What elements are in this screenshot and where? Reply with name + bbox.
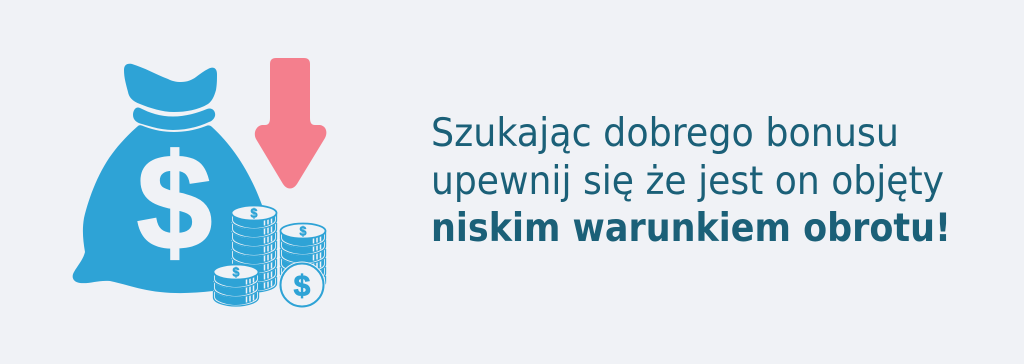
coin stack: small front: $	[233, 266, 240, 280]
coin stack: tall: $	[251, 206, 258, 220]
coin stack: tall	[231, 206, 277, 292]
single upright coin	[278, 262, 326, 308]
coin stack: right: $	[300, 224, 307, 238]
coin stack: small front	[213, 264, 259, 306]
bag body	[73, 125, 262, 293]
text line 3: niskim warunkiem obrotu!	[431, 206, 951, 251]
bag neck top	[124, 64, 217, 112]
dollar sign on bag: $	[137, 126, 212, 278]
arrow pointing down	[255, 58, 326, 188]
bag band	[133, 107, 215, 130]
coin stack: right	[280, 224, 326, 292]
icon: money bag	[73, 64, 262, 293]
text line 2: upewnij się że jest on objęty	[431, 159, 944, 204]
text line 1: Szukając dobrego bonusu	[431, 111, 899, 156]
main message text	[431, 111, 951, 251]
single upright coin: $	[294, 270, 311, 303]
